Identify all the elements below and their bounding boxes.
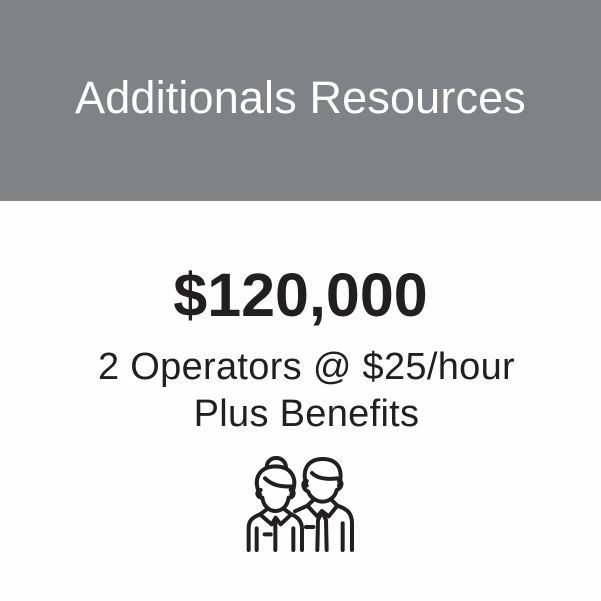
cost figure: $120,000	[173, 261, 428, 329]
woman	[249, 458, 302, 550]
title: Additionals Resources	[75, 72, 526, 123]
description text	[98, 346, 515, 434]
header panel	[0, 0, 601, 201]
man	[295, 459, 352, 550]
description text: Plus Benefits	[194, 392, 419, 434]
icon: two operators	[246, 456, 354, 552]
description text: 2 Operators @ $25/hour	[98, 346, 515, 388]
